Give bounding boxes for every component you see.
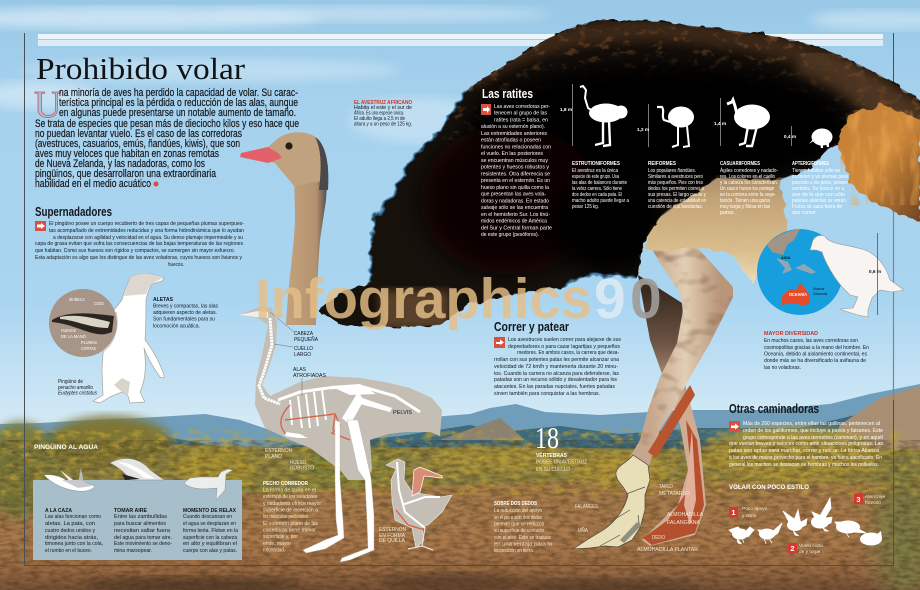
labels: skeleton annotations: PEQUEÑA (294, 336, 319, 343)
text block: Supernadadores: a desplazarse con agilidad y velocidad en el agua. Su denso plumaje impermeable y su (53, 235, 243, 241)
heading: Las ratites: Las ratites (482, 87, 533, 101)
text block: Pecho corredor: rotundidad. (263, 548, 285, 554)
group: Apterigiformes: sentidos. Su hocico no a (792, 186, 844, 192)
text block: Pecho corredor: superficie de inserción a (263, 508, 318, 514)
stat: 18 vertebras (535, 420, 588, 473)
group: Estrutioniformes: pesar 125 kg. (572, 204, 599, 210)
heading: Correr y patear: Correr y patear (494, 320, 569, 334)
labels: foot anatomy (575, 484, 704, 553)
text block: Sobre dos dedos (494, 501, 552, 554)
labels: foot anatomy: FALANGES (575, 504, 599, 510)
labels: skeleton annotations (270, 312, 413, 416)
callout: El avestruz africano (354, 100, 412, 128)
panel: penguin in water: en alto y equilibran el (183, 541, 237, 547)
illustration: penguin with wing detail: CODO (94, 301, 104, 306)
text block: Correr y patear: rrollan con sus potentes patas les permite alcanzar una (494, 357, 619, 363)
text block: Correr y patear: roedores. En ambos casos, la carrera que desa- (517, 350, 619, 356)
callout: El avestruz africano: El adulto llega a 2,5 m de (354, 116, 405, 122)
labels: foot anatomy: FALANGIANA (667, 520, 701, 526)
labels: foot anatomy: TARSO (659, 484, 673, 490)
bird 5 (835, 520, 866, 537)
text block: Sobre dos dedos: en una ventaja para la (494, 542, 552, 548)
leg bones (303, 420, 344, 553)
text block: Aletas: locomoción acuática. (153, 324, 200, 330)
bird 4 (811, 498, 832, 531)
text block: Las ratites: salvaje sólo se las encuentra (481, 205, 548, 211)
diagram: foot bones (573, 455, 650, 549)
step 2 badge: de y torpe (799, 549, 821, 555)
group: Casuariiformes: tación. Tienen una garra (720, 198, 770, 204)
heading: Volar con poco estilo: VOLAR CON POCO ESTILO (729, 484, 809, 491)
front leg (625, 242, 733, 470)
stat: 18 vertebras: POSEE UN AVESTRUZ (536, 460, 588, 466)
text block: Aletas: Breves y compactas, las alas (153, 304, 218, 310)
map globe: Oceania: OCEANÍA (789, 290, 808, 297)
panel: penguin in water: MOMENTO DE RELAX (183, 508, 236, 514)
labels: sternum and bone: ROBUSTO (290, 466, 314, 472)
labels: skeleton annotations: LARGO (294, 352, 311, 358)
text block: Las ratites: el vuelo. En las posteriores (481, 151, 543, 157)
text block: Supernadadores (35, 221, 244, 268)
bird 3 (783, 510, 807, 536)
icon: red arrow (35, 221, 46, 231)
illustration: penguin with wing detail: MUÑECA (69, 296, 86, 302)
group: Reiformes: cuestión de sus bandadas. (648, 204, 703, 210)
panel: penguin in water: necesitan saltar fuera (114, 528, 170, 534)
labels: foot anatomy: ALMOHADILLA PLANTAR (637, 547, 698, 553)
group: Casuariiformes: Ágiles corredores y nadado- (720, 167, 778, 174)
bird 6 (860, 531, 882, 546)
panel: penguin in water: superficie con la cabeza (183, 535, 237, 541)
text block: Las ratites: midos endémicos de América (481, 219, 547, 225)
callout: El avestruz africano: altura y a un peso de 125 kg. (354, 122, 412, 128)
group: Apterigiformes: APTERIGIFORMES (792, 161, 829, 167)
group: Apterigiformes: ave de lo que con sólo (792, 192, 845, 198)
text block: Otras caminadoras: general los machos se destacan de hembras y machos los polluelos. (729, 462, 879, 468)
text block: Mayor diversidad: cosmopolitas gracias a la mano del hombre. En (764, 345, 869, 351)
illustration: penguin with wing detail: DE LA MANO (61, 334, 86, 339)
text block: Pecho corredor: superficie y, por (263, 534, 298, 540)
caption: penacho amarillo (58, 385, 93, 391)
text block: Sobre dos dedos: en el pie a sólo dos dedos (494, 515, 542, 521)
intro paragraph: Se trata de especies que pesan más de dieciocho kilos y eso hace que (35, 118, 299, 130)
map globe: Oceania (757, 229, 843, 315)
ribs and spine (278, 386, 420, 412)
text block: Otras caminadoras: que vuelan breves y veloces como ante situaciones peligrosas. Las (729, 441, 883, 447)
group: Apterigiformes (792, 161, 848, 216)
background: sky and cloud streaks (0, 0, 920, 430)
text block: Supernadadores: Esta adaptación es algo que los distingue de las aves voladoras, cuyos huesos son livianos y (35, 255, 242, 261)
text block: Mayor diversidad: donde más se ha diversificado la avifauna de (764, 358, 866, 364)
labels: foot anatomy: UÑA (578, 527, 589, 534)
group: Reiformes: REIFORMES (648, 161, 676, 167)
label: Esternón en forma de quilla: DE QUILLA (379, 538, 406, 544)
text block: Las ratites: tenecen al grupo de las (494, 111, 547, 117)
group: Reiformes: dedos los permiten correr a (648, 186, 704, 192)
text block: Supernadadores: capa de grasa evitan que sufra las consecuencias de las bajas temperaturas de las regiones (35, 241, 243, 247)
text block: Las ratites: se encuentran músculos muy (481, 158, 548, 164)
icon: arrow (729, 421, 740, 432)
ostrich: legs (628, 247, 733, 546)
step 3 badge: forzoso (865, 500, 881, 506)
ostrich: dark plumage body (318, 15, 920, 330)
drop cap: U (34, 84, 61, 126)
step 2 badge: Vuelo corto (799, 543, 823, 549)
step 3 badge: 3 (856, 495, 861, 504)
text block: Aletas: adquieren aspecto de aletas. (153, 310, 217, 316)
text block: Supernadadores: que habitan. Como sus huesos son rígidos y compactos, se sumergen sin mayor esfuerzo. (35, 248, 235, 254)
penguin: hunting (44, 468, 95, 491)
breastbone in red (281, 405, 350, 440)
text block: Mayor diversidad: las no voladoras. (764, 365, 801, 371)
silhouette: cassowary 1.4 m: 1,4 m (714, 121, 726, 127)
callout: El avestruz africano: Habita el este y el sur de (354, 105, 412, 111)
black core (465, 59, 855, 191)
text block: Las ratites: en el hemisferio Sur. Los tinú- (481, 212, 550, 218)
heading: Otras caminadoras: Otras caminadoras (729, 402, 819, 416)
text block: Pecho corredor: esternón de los saladores (263, 494, 317, 500)
caption: Eudyptes cristatus (58, 390, 97, 396)
text block: Sobre dos dedos: SOBRE DOS DEDOS (494, 501, 537, 507)
group: Reiformes (648, 161, 706, 210)
text block: Otras caminadoras: a las aves de mayor provecho para el hombre, ya fuera sacrificado. En (729, 455, 882, 461)
caption (58, 379, 97, 396)
step 1 badge: 1 (731, 508, 736, 517)
panel: penguin in water: para buscar alimentos (114, 521, 166, 527)
ostrich: orange tail feathers (837, 105, 920, 223)
stat: 18 vertebras: VÉRTEBRAS (536, 451, 567, 459)
stat: 18 vertebras: EN SU CUELLO (536, 467, 570, 473)
step 3 badge (854, 494, 886, 506)
illustration: penguin with wing detail: HUESOS (61, 328, 76, 333)
panel: penguin in water: timonea junto con la cola, (45, 541, 103, 547)
panel: penguin in water (33, 459, 242, 560)
intro paragraph: aves muy veloces que habitan en zonas remotas (35, 148, 219, 160)
group: Estrutioniformes: las alas de balanceo durante (572, 180, 627, 186)
penguin body (93, 273, 164, 403)
text block: Las ratites: hueso plano sin quilla como la (481, 185, 549, 191)
text block: Mayor diversidad: Oceanía, debido al aislamiento continental, es (764, 352, 867, 358)
text block: Correr y patear: depredadores o para cazar lagartijas y pequeños (508, 344, 620, 350)
panel: penguin in water: del agua para tomar aire. (114, 535, 172, 541)
bird 1 (729, 527, 754, 544)
ostrich: neck and head (240, 132, 328, 325)
step 1 badge (729, 506, 768, 519)
text block: Correr y patear: tos. Cuando la carrera no alcanza para defenderse, las (494, 371, 619, 377)
step 2 badge: 2 (790, 544, 795, 553)
text block: Pecho corredor: ende, mayor (263, 541, 291, 547)
labels: foot anatomy: DEDO (652, 535, 665, 541)
intro paragraph: no puedan levantar vuelo. Es el caso de las corredoras (35, 128, 242, 140)
text block: Pecho corredor: La forma de quilla en el (263, 488, 316, 494)
illustration: penguin with wing detail: CORTAS (81, 346, 96, 351)
silhouette: rhea 1.2 m (637, 104, 694, 147)
watermark: 9 (594, 267, 626, 331)
text block: Las ratites: del Sur y Central forman parte (481, 226, 552, 232)
background: scrub and ground (0, 416, 920, 590)
group: Casuariiformes: Un casco hueso los protege (720, 186, 774, 192)
heading: Supernadadores: Supernadadores (35, 205, 112, 219)
label: Esternón en forma de quilla: ESTERNÓN (379, 526, 406, 533)
caption: Pingüino de (58, 379, 83, 385)
watermark: 0 (630, 267, 662, 331)
map globe: Oceania: ASIA (781, 255, 791, 260)
text block: Pecho corredor: y nadadores ofrece mayor (263, 501, 321, 507)
wing detail circle (49, 289, 117, 357)
group: Reiformes: sus presas. El largo cuello y (648, 192, 706, 198)
text block: Las ratites (481, 104, 552, 238)
text block: Las ratites: presenta en el esternón. Es un (481, 178, 550, 184)
labels: skeleton annotations: CABEZA (294, 331, 313, 337)
panel: penguin in water: cuatro dedos unidos y (45, 528, 95, 534)
text block: Sobre dos dedos: con el piso. Esto se traduce (494, 535, 551, 541)
icon: arrow (481, 104, 491, 115)
text block: Otras caminadoras: Más de 260 especies, entre ellas las gallinas, pertenecen al (743, 421, 880, 427)
text block: Correr y patear: sirven también para conquistar a las hembras. (494, 391, 600, 397)
illustration: penguin with wing detail (49, 273, 164, 403)
labels: skeleton annotations: ALAS (293, 367, 307, 373)
silhouette: cassowary 1.4 m (714, 98, 770, 146)
silhouette: rhea 1.2 m: 1,2 m (637, 127, 649, 133)
text block: Supernadadores: huecos. (168, 262, 184, 268)
text block: Las ratites: funciones no relacionadas con (481, 144, 551, 150)
panel: penguin in water: dirigidos hacia atrás, (45, 535, 99, 541)
group: Casuariiformes: y la cabeza los caracterizan. (720, 180, 778, 186)
panel: penguin in water: el rumbo en el buceo. (45, 548, 92, 554)
text block: Correr y patear: velocidad de 72 km/h y mantenerla durante 20 minu- (494, 364, 618, 370)
group: Estrutioniformes: ESTRUTIONIFORMES (572, 161, 620, 167)
text block: Correr y patear (494, 337, 621, 397)
text block: Otras caminadoras: grupo corresponde a las aves terrestres (caminan), y en aquél (743, 435, 883, 441)
step 3 badge: Aterrizaje (865, 494, 886, 500)
top brown band (470, 30, 920, 115)
map globe: Oceania: Nueva (813, 287, 825, 291)
group: Casuariiformes: res. Los colores en el cuello (720, 174, 775, 180)
group: Apterigiformes: Tienen hábitos sólo se (792, 168, 840, 174)
text block: Sobre dos dedos: La reducción del apoyo (494, 508, 542, 514)
group: Reiformes: una carencia de estabilidad en (648, 198, 706, 204)
step 1 badge: y ritmo (742, 513, 757, 519)
intro paragraph: habilidad en el medio acuático (35, 178, 151, 190)
group: Reiformes: más pequeños. Pies con tres (648, 180, 703, 186)
silhouette: kiwi 0.4 m (784, 126, 832, 148)
penguin: resting (184, 469, 233, 500)
panel: penguin in water: aletas. La pata, con (45, 521, 95, 527)
silhouette: kiwi 0.4 m: 0,4 m (784, 134, 796, 140)
text block: Pecho corredor: corredoras tiene menor (263, 528, 316, 534)
text block: Supernadadores: tas acompañado de extremidades reducidas y una forma hidrodinámica que lo ayudan (49, 228, 244, 234)
text block: Otras caminadoras: patas son aptas para marchar, correr y rascar. La tierra Alianza (729, 448, 879, 454)
step 2 badge (788, 543, 823, 555)
group: Estrutioniformes: la veloz carrera. Sólo tiene (572, 186, 622, 192)
panel: penguin in water: el agua se desplazan en (183, 521, 236, 527)
group: Apterigiformes: que comer. (792, 210, 817, 216)
text block: Mayor diversidad (764, 331, 869, 371)
group: Apterigiformes: patetas abiertas se verán (792, 198, 846, 204)
title: Prohibido volar (36, 51, 246, 86)
intro paragraph (34, 84, 299, 190)
bird 2 (758, 523, 782, 544)
text block: Las ratites: resistentes. Otra diferencia se (481, 172, 550, 178)
group: Estrutioniformes: El avestruz es la única (572, 168, 618, 174)
group: Estrutioniformes: especie de este grupo. Usa (572, 174, 619, 180)
group: Reiformes: Similares a avestruces pero (648, 174, 703, 180)
group: Casuariiformes: patas. (720, 210, 735, 216)
panel: penguin in water: TOMAR AIRE (114, 508, 147, 514)
ostrich: cream flank feathers (645, 172, 787, 283)
group: Casuariiformes: muy larga y filosa en las (720, 204, 770, 210)
illustration: white flightless bird with 0.6 m scale (810, 233, 904, 317)
group: Estrutioniformes: dos dedos en cada pata. El (572, 192, 622, 198)
panel: penguin in water: Las alas funcionan como (45, 514, 101, 520)
labels: sternum and bone: PLANO (265, 454, 282, 460)
text block: Aletas: ALETAS (153, 297, 173, 303)
label: Esternón en forma de quilla: EN FORMA (379, 533, 406, 539)
watermark: Infographics (255, 267, 592, 331)
sequence: chicken flight silhouettes (729, 494, 886, 555)
silhouette: ostrich 1.8 m: 1,8 m (560, 107, 572, 113)
text block: Las ratites: Las extremidades anteriores (481, 131, 547, 137)
labels: foot anatomy: METATARSO (659, 491, 690, 497)
labels: foot anatomy: ALMOHADILLA (667, 512, 704, 518)
intro paragraph: terística principal es la pérdida o reducción de las alas, aunque (59, 97, 298, 109)
text block: Aletas (153, 297, 218, 330)
intro paragraph: pingüinos, que desarrollaron una extraordinaria (35, 168, 216, 180)
intro paragraph: en algunas puede presentarse un notable aumento de tamaño. (59, 107, 296, 119)
text block: Las ratites: están atrofiadas o poseen (481, 138, 541, 144)
group: Apterigiformes: conocen y yo plumas para (792, 174, 848, 180)
neck vertebrae (259, 318, 280, 404)
text block: Correr y patear: patadas son un recurso sólido y desalentador para los (494, 377, 617, 383)
text block: Mayor diversidad: MAYOR DIVERSIDAD (764, 331, 818, 337)
group: Casuariiformes (720, 161, 778, 216)
text block: Mayor diversidad: En muchos casos, las aves corredoras son (764, 338, 858, 344)
text block: Las ratites: ratites (rata = balsa, en (494, 118, 548, 124)
panel: penguin in water: cuerpo con alas y patas. (183, 548, 237, 554)
intro paragraph: na minoría de aves ha perdido la capacidad de volar. Su carac- (59, 87, 298, 99)
text block: Correr y patear: atacantes. En las paradas nupciales, fuertes patadas (494, 384, 615, 390)
text block: Otras caminadoras: orden de los galliformes, que incluye a pavos y faisanes. Este (743, 428, 883, 434)
panel: penguin in water: forma lenta. Flotan en la (183, 528, 238, 534)
group: Apterigiformes: parecido a los pelos, poseen (792, 180, 848, 186)
text block: Las ratites: de este grupo (pesóforos). (481, 232, 539, 238)
diagram: ostrich skeleton silhouette (238, 306, 442, 562)
group: Casuariiformes: en la corrrera entre la vege- (720, 192, 776, 198)
text block: Sobre dos dedos: locomoción en tierra. (494, 548, 534, 554)
text block: Sobre dos dedos: permite que se reduzca (494, 522, 544, 528)
step 1 badge: Poco apoyo (742, 506, 768, 512)
panel: penguin in water: Este movimiento se deno- (114, 541, 172, 547)
group: Estrutioniformes: macho adulto puede llegar a (572, 198, 629, 204)
labels: sternum and bone: ESTERNÓN (265, 447, 292, 454)
labels: sternum and bone: HUESO (290, 460, 306, 466)
text block: Aletas: Son fundamentales para su (153, 316, 215, 322)
group: Apterigiformes: Frutos se saca fuera de (792, 204, 842, 210)
heading: Pingüino al agua: PINGÜINO AL AGUA (34, 442, 98, 451)
labels: skeleton annotations: PELVIS (393, 410, 413, 416)
illustration: penguin with wing detail: PLUMAS (81, 340, 97, 345)
intro paragraph: de Nueva Zelanda, y las nadadoras, como los (35, 158, 205, 170)
text block: Las ratites: doras y nadadoras. En estado (481, 198, 549, 204)
panel: penguin in water: Entre las zambullidas (114, 514, 167, 520)
labels: sternum and bone (265, 447, 314, 472)
penguin: breathing (110, 459, 164, 480)
group: Casuariiformes: CASUARIIFORMES (720, 161, 760, 167)
text block: Las ratites: Las aves corredoras per- (494, 104, 550, 110)
icon: arrow (494, 337, 505, 348)
back leg (638, 275, 706, 546)
text block: Otras caminadoras (729, 421, 883, 468)
group: Estrutioniformes (572, 161, 629, 210)
text block: Sobre dos dedos: su superficie de contacto (494, 528, 544, 534)
labels: skeleton annotations: ATROFIADAS (293, 373, 327, 379)
text block: Las ratites: alusión a su esternón plano). (481, 124, 545, 130)
silhouette (238, 306, 442, 480)
callout: El avestruz africano: EL AVESTRUZ AFRICANO (354, 100, 412, 106)
labels: skeleton annotations: CUELLO (294, 346, 313, 352)
text block: Pecho corredor (263, 481, 321, 554)
label: Esternón en forma de quilla (379, 526, 406, 544)
panel: penguin in water: Cuando descansan en (183, 514, 232, 520)
text block: Pecho corredor: El esternón plano de las (263, 521, 318, 527)
map globe: Oceania: Zelanda (813, 292, 828, 296)
panel: penguin in water: mina marsopear. (114, 548, 152, 554)
callout: El avestruz africano: África. Es una especie única. (354, 110, 404, 116)
chart: ratite height silhouettes (560, 84, 832, 148)
diagram: small keeled bird skeleton (386, 459, 452, 550)
text block: Las ratites: que presentan las aves vola- (481, 192, 546, 198)
silhouette: ostrich 1.8 m (560, 84, 628, 146)
text block: Supernadadores: El pingüino posee un cuerpo recubierto de tres capas de pequeñas plumas superpues- (49, 221, 244, 227)
intro paragraph: (avestruces, casuarios, emús, ñandúes, kiwis), que son (35, 138, 240, 150)
stat: 18 vertebras: 18 (535, 420, 559, 455)
panel: penguin in water: A LA CAZA (45, 508, 72, 514)
background: mountains (0, 384, 920, 480)
group: Reiformes: Los populares ñandúes. (648, 168, 696, 174)
text block: Correr y patear: Los avestruces suelen correr para alejarse de sus (508, 337, 621, 343)
text block: Pecho corredor: PECHO CORREDOR (263, 481, 308, 487)
text block: Las ratites: potentes y huesos robustos y (481, 165, 549, 171)
text block: Pecho corredor: los músculos pectorales. (263, 514, 309, 520)
illustration: white flightless bird with 0.6 m scale: 0,6 m (869, 269, 881, 275)
